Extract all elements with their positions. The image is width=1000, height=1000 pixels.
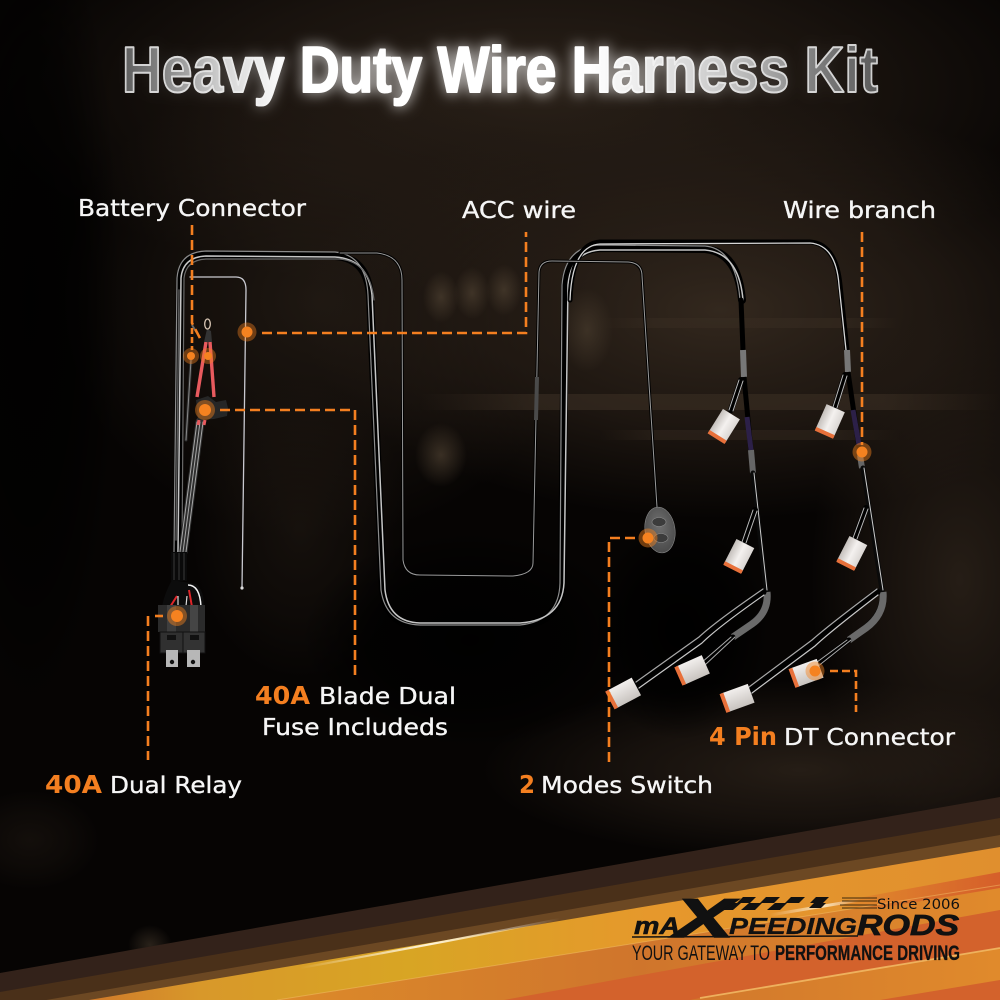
2 modes switch — [642, 505, 678, 555]
logo wordmark: mA — [634, 913, 680, 940]
title: Heavy Duty Wire Harness Kit — [122, 33, 878, 106]
connector 2 — [723, 539, 754, 574]
connector 4 — [674, 655, 710, 686]
label: 40A Dual Relay: 40A — [45, 770, 103, 799]
DT connectors — [605, 404, 867, 713]
logo underline — [632, 936, 858, 937]
label: 4 Pin DT Connector: 4 Pin — [709, 722, 777, 751]
label: Wire branch: Wire branch — [783, 196, 936, 224]
connector 8 — [789, 659, 824, 688]
wire harness: main bundle — [174, 242, 883, 693]
connector 7 — [720, 684, 755, 713]
logo wordmark: PEEDING — [729, 913, 857, 939]
label: 40A Blade Dual Fuse Includeds: Fuse Includeds — [262, 713, 448, 741]
connector 1 — [708, 409, 740, 444]
thin ACC wire — [190, 277, 246, 590]
logo since text: Since 2006 — [877, 897, 960, 913]
connector 3 — [605, 678, 641, 709]
connector 6 — [836, 536, 867, 571]
logo tagline — [632, 942, 960, 965]
dashed callout lines — [148, 225, 862, 765]
label: 40A Blade Dual Fuse Includeds: 40A — [255, 681, 311, 710]
title: Heavy Duty Wire Harness Kit — [122, 33, 878, 106]
label: 40A Dual Relay — [45, 770, 242, 799]
label: 4 Pin DT Connector: DT Connector — [784, 723, 955, 751]
label: ACC wire: ACC wire — [462, 196, 576, 224]
label: 4 Pin DT Connector — [709, 722, 955, 751]
logo speed lines — [840, 898, 877, 908]
battery connector: red wires and ring terminal — [192, 319, 214, 425]
logo wordmark: RODS — [857, 910, 960, 942]
logo wordmark: X — [669, 887, 739, 949]
thin switch wire — [340, 253, 657, 576]
label: 40A Dual Relay: Dual Relay — [110, 771, 242, 799]
label: Battery Connector: Battery Connector — [78, 194, 306, 222]
label: 2 Modes Switch: 2 — [519, 770, 535, 799]
label: 40A Blade Dual Fuse Includeds — [255, 681, 456, 741]
relay — [158, 552, 205, 667]
upper right long cable — [570, 242, 847, 350]
lower branch group A — [636, 300, 767, 688]
connector 5 — [815, 404, 845, 439]
logo tagline: YOUR GATEWAY TO — [632, 942, 770, 965]
logo wordmark — [634, 887, 960, 949]
fuse holder — [196, 396, 228, 420]
label: 40A Blade Dual Fuse Includeds: Blade Dual — [319, 682, 456, 710]
logo: maXpeedingRODS — [632, 887, 960, 965]
callout dots — [167, 322, 872, 680]
lower branch group B — [749, 350, 883, 693]
logo checker flag — [716, 897, 829, 910]
bottom orange speed stripes — [0, 797, 1000, 1000]
label: 2 Modes Switch: Modes Switch — [541, 771, 713, 799]
main loop cable — [174, 245, 743, 626]
left branch to relay — [180, 360, 203, 552]
